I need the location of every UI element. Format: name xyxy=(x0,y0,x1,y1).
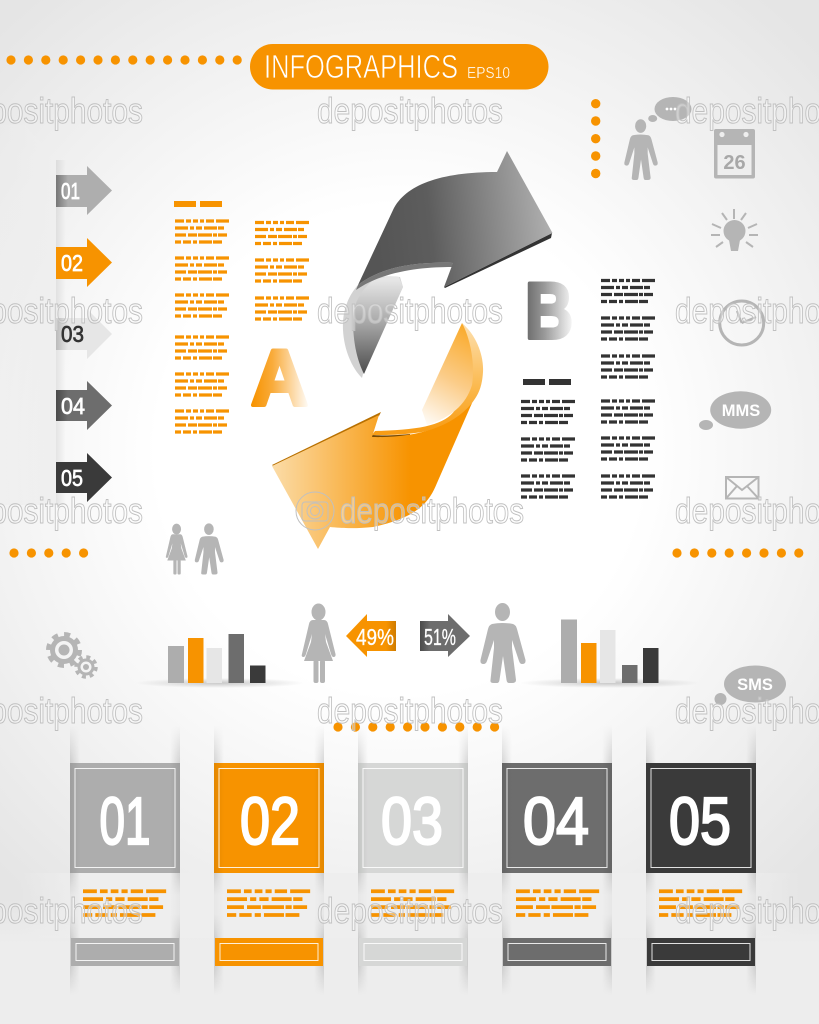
watermarks: depositphotos xyxy=(317,690,503,731)
letter A: A xyxy=(251,333,308,422)
side arrow 02 xyxy=(56,238,112,287)
card 01 xyxy=(70,725,180,995)
top right dots xyxy=(591,99,600,178)
side arrow 05: 05 xyxy=(61,465,83,491)
icon: clock xyxy=(720,301,764,345)
side arrow 04 xyxy=(56,381,112,430)
icon: woman xyxy=(302,604,336,683)
card 04 xyxy=(502,725,612,995)
side arrow 03 xyxy=(56,309,112,359)
icon: calendar: 26 xyxy=(723,152,746,174)
card 02 xyxy=(214,725,324,995)
card 03 xyxy=(358,725,468,995)
gray cycle arrow xyxy=(343,151,552,378)
card 04: 04 xyxy=(523,784,589,859)
numbered cards xyxy=(70,725,756,995)
watermarks: depositphotos xyxy=(317,890,503,931)
orange text column xyxy=(174,204,309,432)
icon: SMS bubble xyxy=(714,666,786,705)
side arrow 01 xyxy=(56,166,112,215)
numbered side arrows xyxy=(56,166,112,502)
arrow: 49 percent xyxy=(346,614,396,657)
side arrow 01: 01 xyxy=(61,178,80,204)
icon: MMS bubble: MMS xyxy=(722,402,760,420)
title pill: INFOGRAPHICS xyxy=(264,48,458,85)
side arrow 03: 03 xyxy=(61,321,84,347)
icon: envelope xyxy=(726,477,758,498)
card 01: 01 xyxy=(100,784,150,859)
arrow: 49 percent: 49% xyxy=(356,624,394,650)
horizontal card band xyxy=(20,873,800,938)
arrow: 51 percent: 51% xyxy=(424,624,456,650)
watermarks: depositphotos xyxy=(317,290,503,331)
top dotted line xyxy=(6,55,242,65)
card 05 xyxy=(646,725,756,995)
side arrow 02: 02 xyxy=(61,250,83,276)
right divider dots xyxy=(672,548,803,558)
left panel edge xyxy=(0,125,66,505)
icon: calendar xyxy=(714,129,755,178)
icon: thinking man xyxy=(624,97,692,180)
letter B: B xyxy=(525,266,573,355)
middle dotted line xyxy=(333,722,499,732)
arrow: 51 percent xyxy=(420,614,470,657)
small woman and man icons xyxy=(166,523,224,575)
icon: man xyxy=(480,603,526,683)
orange cycle arrow xyxy=(272,323,483,549)
icon: gears xyxy=(48,634,96,677)
title pill: EPS10 xyxy=(467,65,510,82)
icon: MMS bubble xyxy=(699,391,771,430)
watermarks: depositphotos xyxy=(340,490,524,531)
side arrow 05 xyxy=(56,453,112,502)
icon: light bulb xyxy=(711,209,758,251)
card 02: 02 xyxy=(240,784,300,859)
dark text columns xyxy=(521,280,655,497)
title pill xyxy=(250,44,548,90)
card 05: 05 xyxy=(669,784,731,859)
icon: SMS bubble: SMS xyxy=(737,676,773,694)
left bar chart xyxy=(135,634,305,688)
left divider dots xyxy=(9,548,88,558)
watermarks: depositphotos xyxy=(317,90,503,131)
right bar chart xyxy=(520,620,700,688)
card 03: 03 xyxy=(381,784,443,859)
side arrow 04: 04 xyxy=(61,393,85,419)
